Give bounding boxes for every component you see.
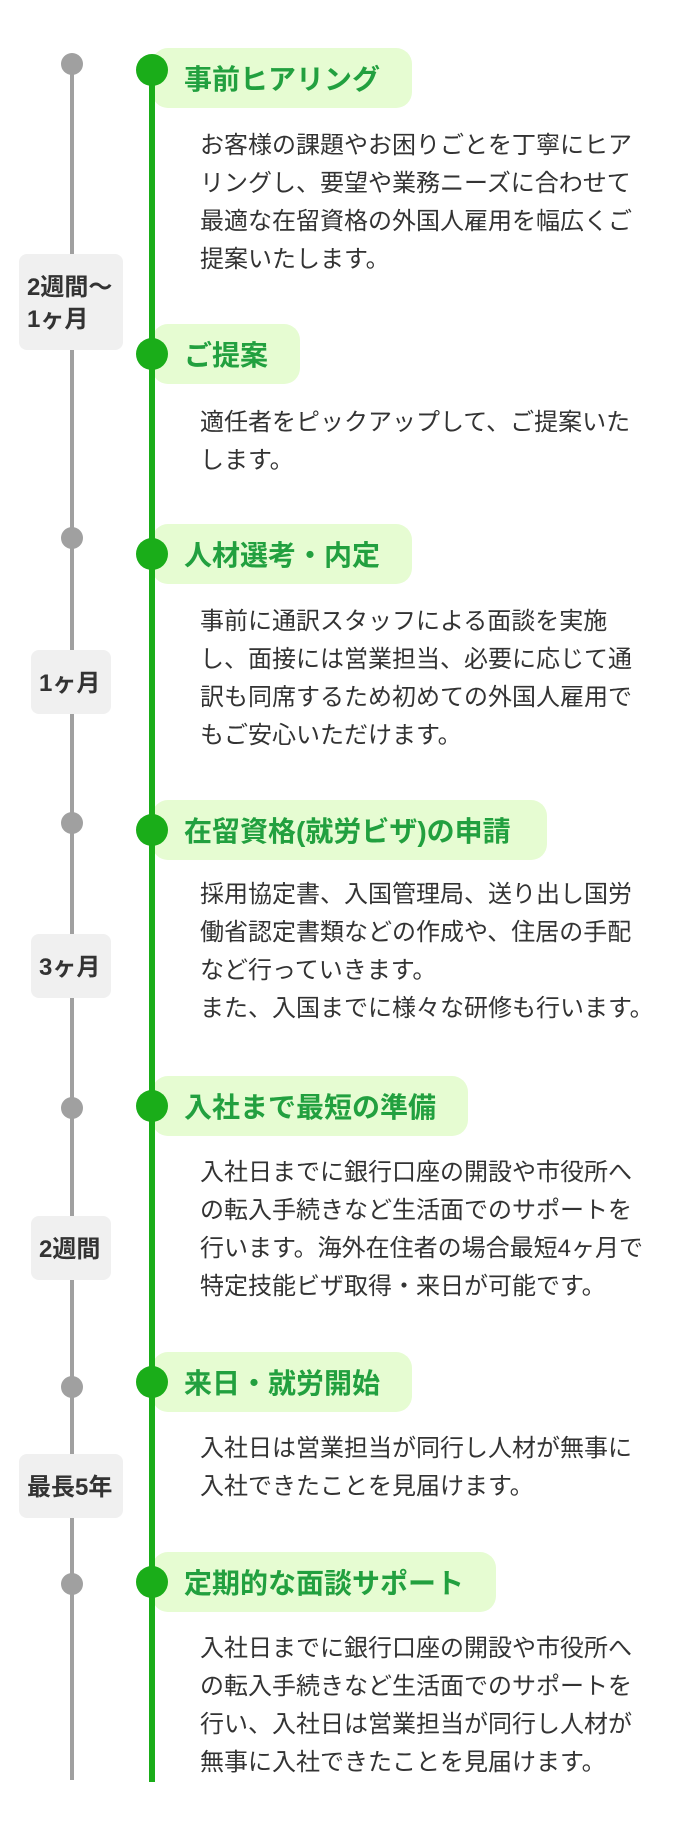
step 5 heading: 入社まで最短の準備 [184, 1092, 436, 1123]
panel: step 5 preparation [136, 1076, 643, 1300]
time axis line [70, 64, 74, 1780]
step 4 text: 働省認定書類などの作成や、住居の手配 [200, 919, 631, 946]
step 7 text: の転入手続きなど生活面でのサポートを [200, 1673, 632, 1700]
step 3 heading [152, 524, 412, 584]
step 7 text: 行い、入社日は営業担当が同行し人材が [200, 1711, 632, 1738]
step 7 marker [136, 1566, 168, 1598]
step 2 text [200, 409, 630, 474]
step 7 heading [152, 1552, 496, 1612]
step 2 heading [152, 324, 300, 384]
duration label: 2 weeks: 2週間 [39, 1236, 100, 1263]
duration label: 2 weeks to 1 month: 1ヶ月 [27, 306, 88, 333]
step 7 heading: 定期的な面談サポート [184, 1568, 464, 1599]
step 3 heading: 人材選考・内定 [184, 540, 380, 571]
duration label: 1 month: 1ヶ月 [39, 670, 100, 697]
step 1 text: 最適な在留資格の外国人雇用を幅広くご [200, 208, 632, 235]
panel: step 7 regular support [136, 1552, 632, 1776]
step 5 text: 入社日までに銀行口座の開設や市役所へ [200, 1159, 632, 1186]
process axis line [149, 70, 155, 1782]
panel: step 1 hearing [136, 48, 632, 273]
time marker dot 5 [61, 1376, 83, 1398]
duration label: 2 weeks to 1 month: 2週間〜 [27, 274, 112, 301]
step 3 text: し、面接には営業担当、必要に応じて通 [200, 646, 632, 673]
time marker dot 2 [61, 527, 83, 549]
step 1 text: お客様の課題やお困りごとを丁寧にヒア [200, 132, 632, 159]
duration label: 2 weeks to 1 month [19, 254, 123, 350]
step 1 heading [152, 48, 412, 108]
panel: step 3 selection [136, 524, 632, 749]
step 5 text [200, 1159, 643, 1300]
step 3 marker [136, 538, 168, 570]
step 7 text [200, 1635, 632, 1776]
duration label: 2 weeks [31, 1216, 111, 1280]
step 7 text: 無事に入社できたことを見届けます。 [200, 1749, 606, 1776]
step 6 text: 入社日は営業担当が同行し人材が無事に [200, 1435, 632, 1462]
step 1 text [200, 132, 632, 273]
step 1 marker [136, 54, 168, 86]
step 4 heading [152, 800, 547, 860]
panel: step 2 proposal [136, 324, 630, 474]
step 4 marker [136, 814, 168, 846]
time marker dot 3 [61, 812, 83, 834]
step 6 text: 入社できたことを見届けます。 [200, 1473, 534, 1500]
step 2 heading: ご提案 [184, 340, 268, 371]
step 4 text: 採用協定書、入国管理局、送り出し国労 [200, 881, 632, 908]
step 1 text: リングし、要望や業務ニーズに合わせて [200, 170, 631, 197]
step 2 marker [136, 338, 168, 370]
panel: step 6 arrival [136, 1352, 632, 1500]
step 5 heading [152, 1076, 468, 1136]
step 1 heading: 事前ヒアリング [184, 64, 380, 95]
step 4 text [200, 881, 654, 1022]
step 5 text: 特定技能ビザ取得・来日が可能です。 [200, 1273, 606, 1300]
step 6 marker [136, 1366, 168, 1398]
step 4 text: など行っていきます。 [200, 957, 436, 984]
time marker dot 6 [61, 1573, 83, 1595]
duration label: 1 month [31, 650, 111, 714]
step 1 text: 提案いたします。 [200, 246, 390, 273]
step 2 text: します。 [200, 447, 294, 474]
step 5 text: の転入手続きなど生活面でのサポートを [200, 1197, 632, 1224]
step 3 text [200, 608, 632, 749]
time marker dot 1 [61, 53, 83, 75]
duration label: 3 months [31, 934, 111, 998]
step 6 heading: 来日・就労開始 [184, 1368, 380, 1399]
step 4 text: また、入国までに様々な研修も行います。 [200, 995, 654, 1022]
step 4 heading: 在留資格(就労ビザ)の申請 [184, 816, 511, 847]
step 7 text: 入社日までに銀行口座の開設や市役所へ [200, 1635, 632, 1662]
step 3 text: 事前に通訳スタッフによる面談を実施 [200, 608, 607, 635]
duration label: up to 5 years [19, 1454, 123, 1518]
step 5 text: 行います。海外在住者の場合最短4ヶ月で [200, 1235, 643, 1262]
step 6 heading [152, 1352, 412, 1412]
duration label: 3 months: 3ヶ月 [39, 954, 100, 981]
step 6 text [200, 1435, 632, 1500]
step 2 text: 適任者をピックアップして、ご提案いた [200, 409, 630, 436]
step 5 marker [136, 1090, 168, 1122]
panel: step 4 visa application [136, 800, 654, 1022]
step 3 text: もご安心いただけます。 [200, 722, 462, 749]
time marker dot 4 [61, 1097, 83, 1119]
step 3 text: 訳も同席するため初めての外国人雇用で [200, 684, 632, 711]
duration label: up to 5 years: 最長5年 [27, 1474, 112, 1501]
